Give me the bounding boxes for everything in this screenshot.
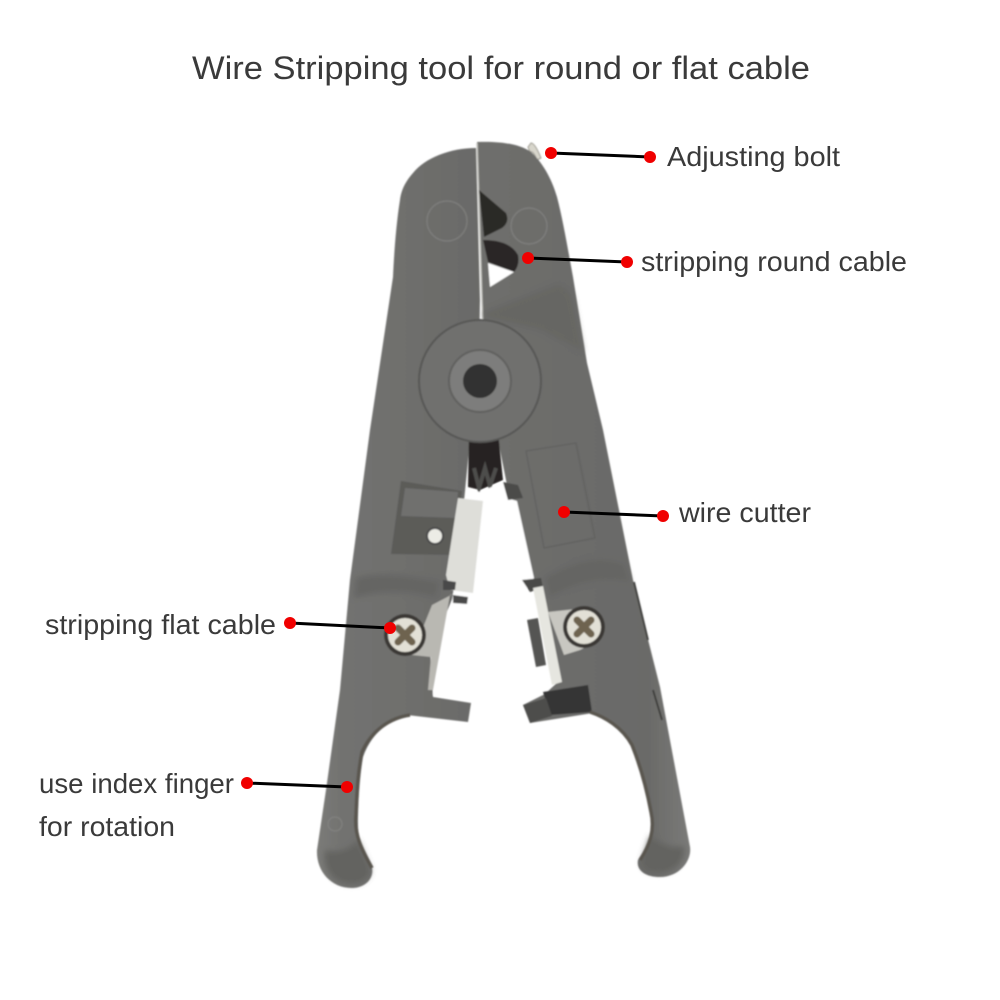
callout: stripping round cable: stripping round cable [641,246,907,277]
callout: stripping flat cable [45,609,396,640]
right jaw base block [543,685,592,715]
callout: stripping flat cable: stripping flat cable [45,609,276,640]
left blade [412,594,453,690]
shoulder ridge shading, left [354,575,440,598]
callout: wire cutter [558,497,811,528]
callout: use index finger for rotation: for rotation [39,811,175,842]
icon: wire stripping tool photo illustration [317,142,690,888]
left half of tool body [317,148,480,888]
right white plate [548,608,600,655]
round cable notches [479,190,507,237]
shoulder ridge shading, right [544,559,630,598]
callout: use index finger for rotation [39,768,353,842]
left screw [384,614,426,656]
jaw split line [477,143,483,325]
callout: adjusting bolt: Adjusting bolt [667,141,840,172]
jaw ridge shading [484,284,583,352]
callout: stripping round cable [522,246,907,277]
right window panel [526,443,595,548]
title: Wire Stripping tool for round or flat cable [192,50,810,86]
callout: wire cutter: wire cutter [678,497,811,528]
right dark blade slot [522,578,543,592]
dark block beside spring [503,482,523,500]
finger lobes shading [325,840,370,884]
right white blade [533,586,562,685]
finger loop inner rims [356,715,410,868]
right screw [563,606,605,648]
left white slider [446,498,483,593]
central gap [433,482,534,700]
right half of tool body [477,142,690,877]
right jaw arm [523,698,552,723]
callout: use index finger for rotation: use index finger [39,768,234,799]
spring [468,432,503,490]
callout: adjusting bolt [545,141,840,172]
adjusting bolt [528,143,541,160]
right side dark edge [634,582,662,720]
left window recess [391,481,462,555]
pivot disc [419,320,541,442]
embossed circles [427,201,467,241]
